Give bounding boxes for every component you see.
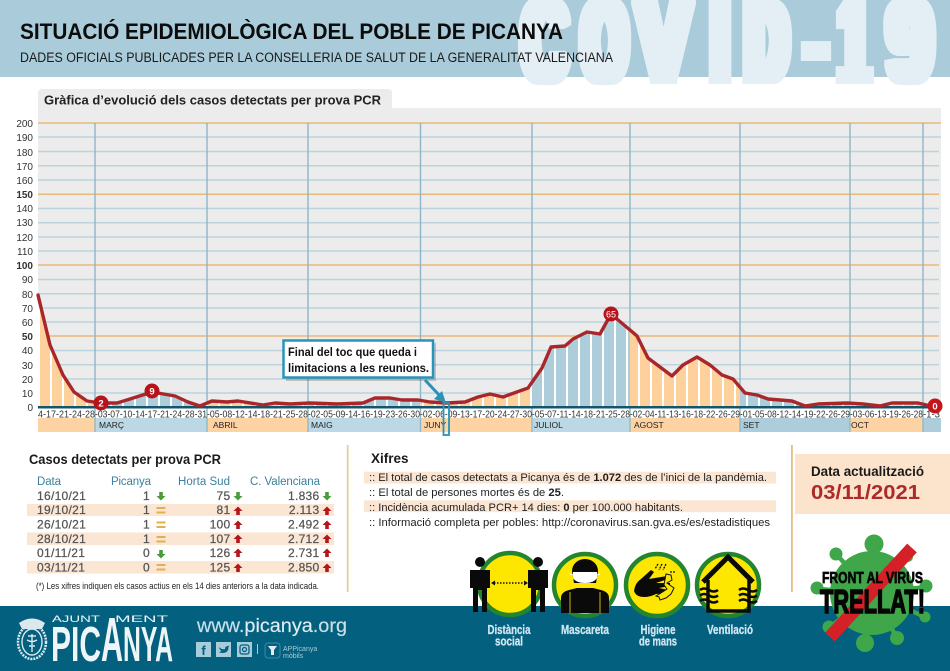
bars under the line [38, 303, 923, 406]
y axis labels: 180 [16, 148, 33, 159]
icon: mask [554, 554, 616, 616]
icon labels: Ventilació [707, 623, 753, 637]
callout: end of curfew [284, 340, 436, 381]
x axis date labels: -05-08-12-14-18-21-25-28 [207, 408, 308, 420]
table rows: 2.492 [288, 518, 320, 532]
y axis labels: 170 [16, 162, 33, 173]
table rows: 75 [217, 489, 231, 503]
arrow: callout to date [425, 380, 449, 435]
table rows: 2.850 [288, 560, 320, 574]
y axis labels: 130 [16, 218, 33, 229]
data marker: 9: 9 [149, 386, 155, 398]
badge: front al virus trellat [810, 534, 932, 652]
watermark: COVID-19 [523, 0, 932, 106]
y axis labels: 150 [16, 190, 33, 201]
month labels: AGOST [634, 420, 664, 430]
y axis labels: 30 [22, 361, 33, 372]
table rows: 125 [210, 560, 231, 574]
table rows: 1.836 [288, 489, 320, 503]
table rows: 81 [217, 503, 231, 517]
social icons [196, 642, 258, 658]
y axis labels: 200 [16, 119, 33, 130]
table rows: 01/11/21 [37, 546, 85, 560]
icon: social distance [470, 553, 548, 615]
table rows: 0 [143, 560, 150, 574]
table rows: 26/10/21 [37, 518, 86, 532]
figures text [369, 472, 771, 529]
data marker: 65 [604, 306, 618, 322]
table rows: 2.113 [289, 503, 320, 517]
data marker: 65: 65 [606, 310, 616, 320]
table rows: 0 [143, 546, 150, 560]
y axis labels: 90 [22, 275, 33, 286]
social icons: f [201, 643, 206, 658]
app badge: APPicanya [283, 646, 317, 653]
icon labels: Distància [488, 623, 531, 637]
month labels: OCT [851, 420, 869, 430]
month labels: JULIOL [534, 420, 563, 430]
x axis date labels: -05-07-11-14-18-21-25-28 [532, 408, 630, 420]
month labels: MARÇ [99, 420, 124, 430]
month labels [99, 420, 869, 430]
table rows: 107 [210, 532, 231, 546]
figures stripes [364, 472, 776, 512]
data marker: 0: 0 [932, 402, 938, 412]
chart tab heading: Gràfica d’evolució dels casos detectats per prova PCR [44, 92, 382, 108]
data marker: 0 [928, 398, 942, 414]
logo: Ajuntament Picanya wordmark: AJUNT [52, 614, 101, 624]
y axis labels: 40 [22, 346, 33, 357]
icon labels: Mascareta [561, 623, 610, 637]
table rows: 2.712 [288, 532, 320, 546]
panel: update date: 03/11/2021 [811, 482, 920, 504]
month labels: SET [743, 420, 760, 430]
y axis labels: 80 [22, 290, 33, 301]
table rows: 1 [143, 518, 150, 532]
table header: Horta Sud [178, 476, 230, 488]
data marker: 2: 2 [98, 398, 104, 410]
table rows: 19/10/21 [37, 503, 86, 517]
trend arrows [156, 492, 332, 572]
logo: Ajuntament Picanya wordmark: NYA [123, 618, 173, 671]
month band [38, 418, 941, 432]
data marker: 2 [94, 396, 108, 410]
x axis date labels: -1-3 [923, 408, 940, 420]
month labels: MAIG [311, 420, 333, 430]
table rows: 1 [143, 503, 150, 517]
panel: evolution chart [16, 89, 942, 435]
x axis date labels: 4-17-21-24-28 [38, 408, 95, 420]
table rows: 1 [143, 532, 150, 546]
icon labels: de mans [639, 634, 677, 648]
y axis labels: 100 [16, 261, 33, 272]
table heading: Casos detectats per prova PCR [29, 452, 221, 467]
table footnote: (*) Les xifres indiquen els casos actius en els 14 dies anteriors a la data indicada. [36, 581, 319, 591]
month labels: JUNY [424, 420, 447, 430]
y axis labels [16, 119, 33, 414]
website url: www.picanya.org [196, 616, 347, 637]
data marker: 9 [144, 384, 160, 398]
x axis date labels: -03-07-10-14-17-21-24-28-31 [95, 408, 207, 420]
x axis date labels: -02-06-09-13-17-20-24-27-30 [420, 408, 532, 420]
x axis date labels: -01-05-08-12-14-19-22-26-29 [740, 408, 850, 420]
x axis baseline [38, 406, 941, 408]
y axis labels: 70 [22, 304, 33, 315]
y axis labels: 50 [22, 332, 33, 343]
table rows: 2.731 [288, 546, 320, 560]
y axis labels: 140 [16, 204, 33, 215]
y axis labels: 160 [16, 176, 33, 187]
panel: key figures [364, 451, 776, 529]
table rows: 28/10/21 [37, 532, 86, 546]
table header: Picanya [111, 476, 152, 488]
y axis labels: 190 [16, 133, 33, 144]
callout: end of curfew: limitacions a les reunions. [288, 363, 429, 375]
figures text: :: El total de persones mortes és de 25. [369, 487, 564, 499]
footer band [0, 606, 950, 671]
app badge [265, 643, 317, 660]
icon labels [488, 623, 753, 648]
table header: Data [37, 476, 62, 488]
table header: C. Valenciana [250, 476, 321, 488]
x axis date labels: -02-05-09-14-16-19-23-26-30 [308, 408, 420, 420]
title: SITUACIÓ EPIDEMIOLÒGICA DEL POBLE DE PICANYA [20, 19, 563, 44]
icon: ventilation [697, 554, 759, 616]
logo: Ajuntament Picanya wordmark: MENT [115, 614, 169, 624]
table rows: 03/11/21 [37, 560, 85, 574]
logo: Ajuntament Picanya wordmark [51, 606, 173, 671]
y axis labels: 0 [27, 403, 33, 414]
icon labels: Higiene [640, 623, 676, 637]
y axis labels: 120 [16, 233, 33, 244]
icon labels: social [495, 634, 523, 648]
logo: Ajuntament Picanya wordmark: PIC [51, 618, 101, 671]
figures text: :: Incidència acumulada PCR+ 14 dies: 0 per 100.000 habitants. [369, 502, 683, 514]
x axis date labels: -02-04-11-13-16-18-22-26-29 [630, 408, 740, 420]
table stripes [27, 504, 334, 574]
figures text: :: El total de casos detectats a Picanya és de 1.072 des de l’inici de la pandèmia. [369, 472, 767, 484]
x axis date labels: -03-06-13-19-26-28 [850, 408, 923, 420]
table rows: 1 [143, 489, 150, 503]
trend line [38, 295, 935, 407]
table header [37, 476, 321, 488]
figures text: :: Informació completa per pobles: http://coronavirus.san.gva.es/es/estadistiques [369, 517, 771, 529]
y axis labels: 10 [22, 389, 33, 400]
y axis labels: 60 [22, 318, 33, 329]
panel: cases table [27, 452, 334, 591]
subtitle: DADES OFICIALS PUBLICADES PER LA CONSELLERIA DE SALUT DE LA GENERALITAT VALENCIANA [20, 50, 613, 65]
y axis labels: 110 [17, 247, 33, 258]
header band [0, 0, 950, 77]
x axis date labels [38, 408, 940, 420]
figures heading: Xifres [371, 451, 409, 466]
callout: end of curfew: Final del toc que queda i [288, 347, 417, 359]
month labels: ABRIL [213, 420, 238, 430]
table rows [37, 489, 320, 574]
app badge: mòbils [283, 653, 304, 660]
panel: update date [795, 454, 950, 514]
table rows: 16/10/21 [37, 489, 86, 503]
table rows: 126 [210, 546, 231, 560]
icon: hand hygiene [626, 554, 688, 616]
y axis labels: 20 [22, 375, 33, 386]
panel: update date: Data actualització [811, 464, 924, 479]
table rows: 100 [210, 518, 231, 532]
logo: Picanya crest [18, 618, 46, 659]
